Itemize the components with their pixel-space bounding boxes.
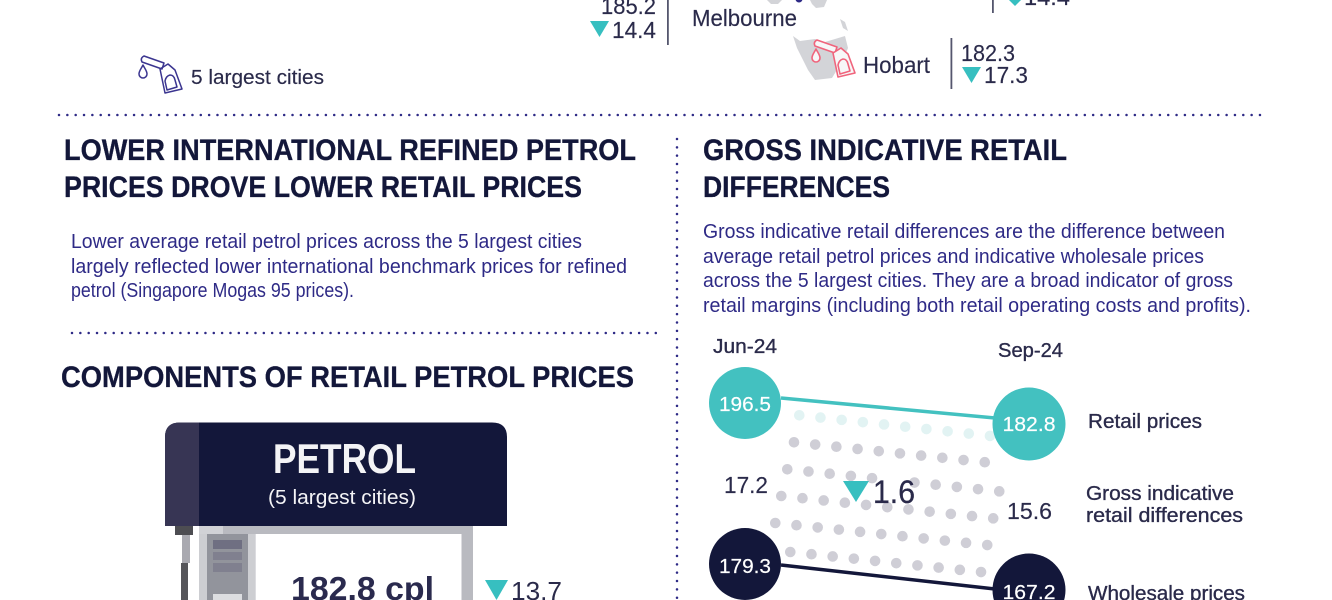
text block: refined petrol explanation: Lower average retail petrol prices across the 5 largest cities [71, 231, 582, 253]
heading: gross indicative retail differences: GROSS INDICATIVE RETAIL [703, 134, 1067, 167]
wholesale price line [709, 528, 1066, 600]
text block: refined petrol explanation: largely reflected lower international benchmark prices for refined [71, 256, 627, 278]
text block: refined petrol explanation: petrol (Singapore Mogas 95 prices). [71, 280, 354, 302]
heading: refined petrol prices: PRICES DROVE LOWER RETAIL PRICES [64, 171, 582, 204]
heading: gross indicative retail differences [703, 134, 1067, 204]
retail price line: 182.8 [1002, 414, 1056, 436]
heading: gross indicative retail differences: DIFFERENCES [703, 171, 890, 204]
date labels [713, 336, 1063, 362]
wholesale price line: 179.3 [719, 556, 771, 578]
pump hose [175, 526, 193, 600]
difference values: 17.2 [724, 472, 768, 498]
pump roof sign: (5 largest cities) [268, 487, 416, 509]
legend: 5 largest cities: 5 largest cities [191, 67, 324, 89]
text block: refined petrol explanation [71, 231, 627, 302]
pump roof sign: PETROL [273, 435, 416, 482]
text block: gross indicative retail differences explanation: retail margins (including both retail operating costs and profits). [703, 295, 1251, 317]
heading: refined petrol prices: LOWER INTERNATIONAL REFINED PETROL [64, 134, 636, 167]
Hobart price: Hobart [863, 52, 931, 78]
series labels [1086, 411, 1245, 600]
Hobart price: 182.3 [961, 40, 1015, 66]
heading: components of retail petrol prices: COMPONENTS OF RETAIL PETROL PRICES [61, 361, 634, 394]
heading: refined petrol prices [64, 134, 636, 204]
series labels: Retail prices [1088, 411, 1202, 433]
text block: gross indicative retail differences explanation: average retail petrol prices and indicative wholesale prices [703, 246, 1204, 268]
map: Victoria and Tasmania fragment [767, 0, 848, 80]
difference values: 1.6 [873, 474, 915, 510]
difference values: 15.6 [1007, 498, 1052, 524]
pump body [199, 526, 473, 600]
icon: Hobart fuel nozzle [812, 40, 855, 77]
dotted gap between retail and wholesale [775, 415, 1006, 572]
Hobart price: 17.3 [984, 62, 1028, 88]
pump roof sign [165, 422, 507, 526]
Melbourne price: Melbourne [692, 5, 797, 31]
text block: gross indicative retail differences explanation: across the 5 largest cities. They are a broad indicator of gross [703, 270, 1233, 292]
series labels: retail differences [1086, 505, 1243, 527]
text block: gross indicative retail differences explanation [703, 221, 1251, 317]
Melbourne price [590, 0, 797, 45]
retail price line: 196.5 [719, 394, 771, 416]
fragment of price callout, top right [992, 0, 1070, 13]
slope chart: retail, wholesale and differences [709, 336, 1245, 600]
Hobart price [863, 38, 1028, 89]
date labels: Sep-24 [998, 340, 1063, 362]
date labels: Jun-24 [713, 336, 777, 358]
Melbourne price: 14.4 [612, 17, 656, 43]
text block: gross indicative retail differences explanation: Gross indicative retail differences are the difference between [703, 221, 1225, 243]
difference values [724, 472, 1052, 524]
series labels: Gross indicative [1086, 483, 1234, 505]
petrol pump illustration [165, 422, 562, 600]
legend: 5 largest cities [139, 56, 324, 93]
price change [485, 576, 562, 600]
retail price line [709, 367, 1066, 460]
